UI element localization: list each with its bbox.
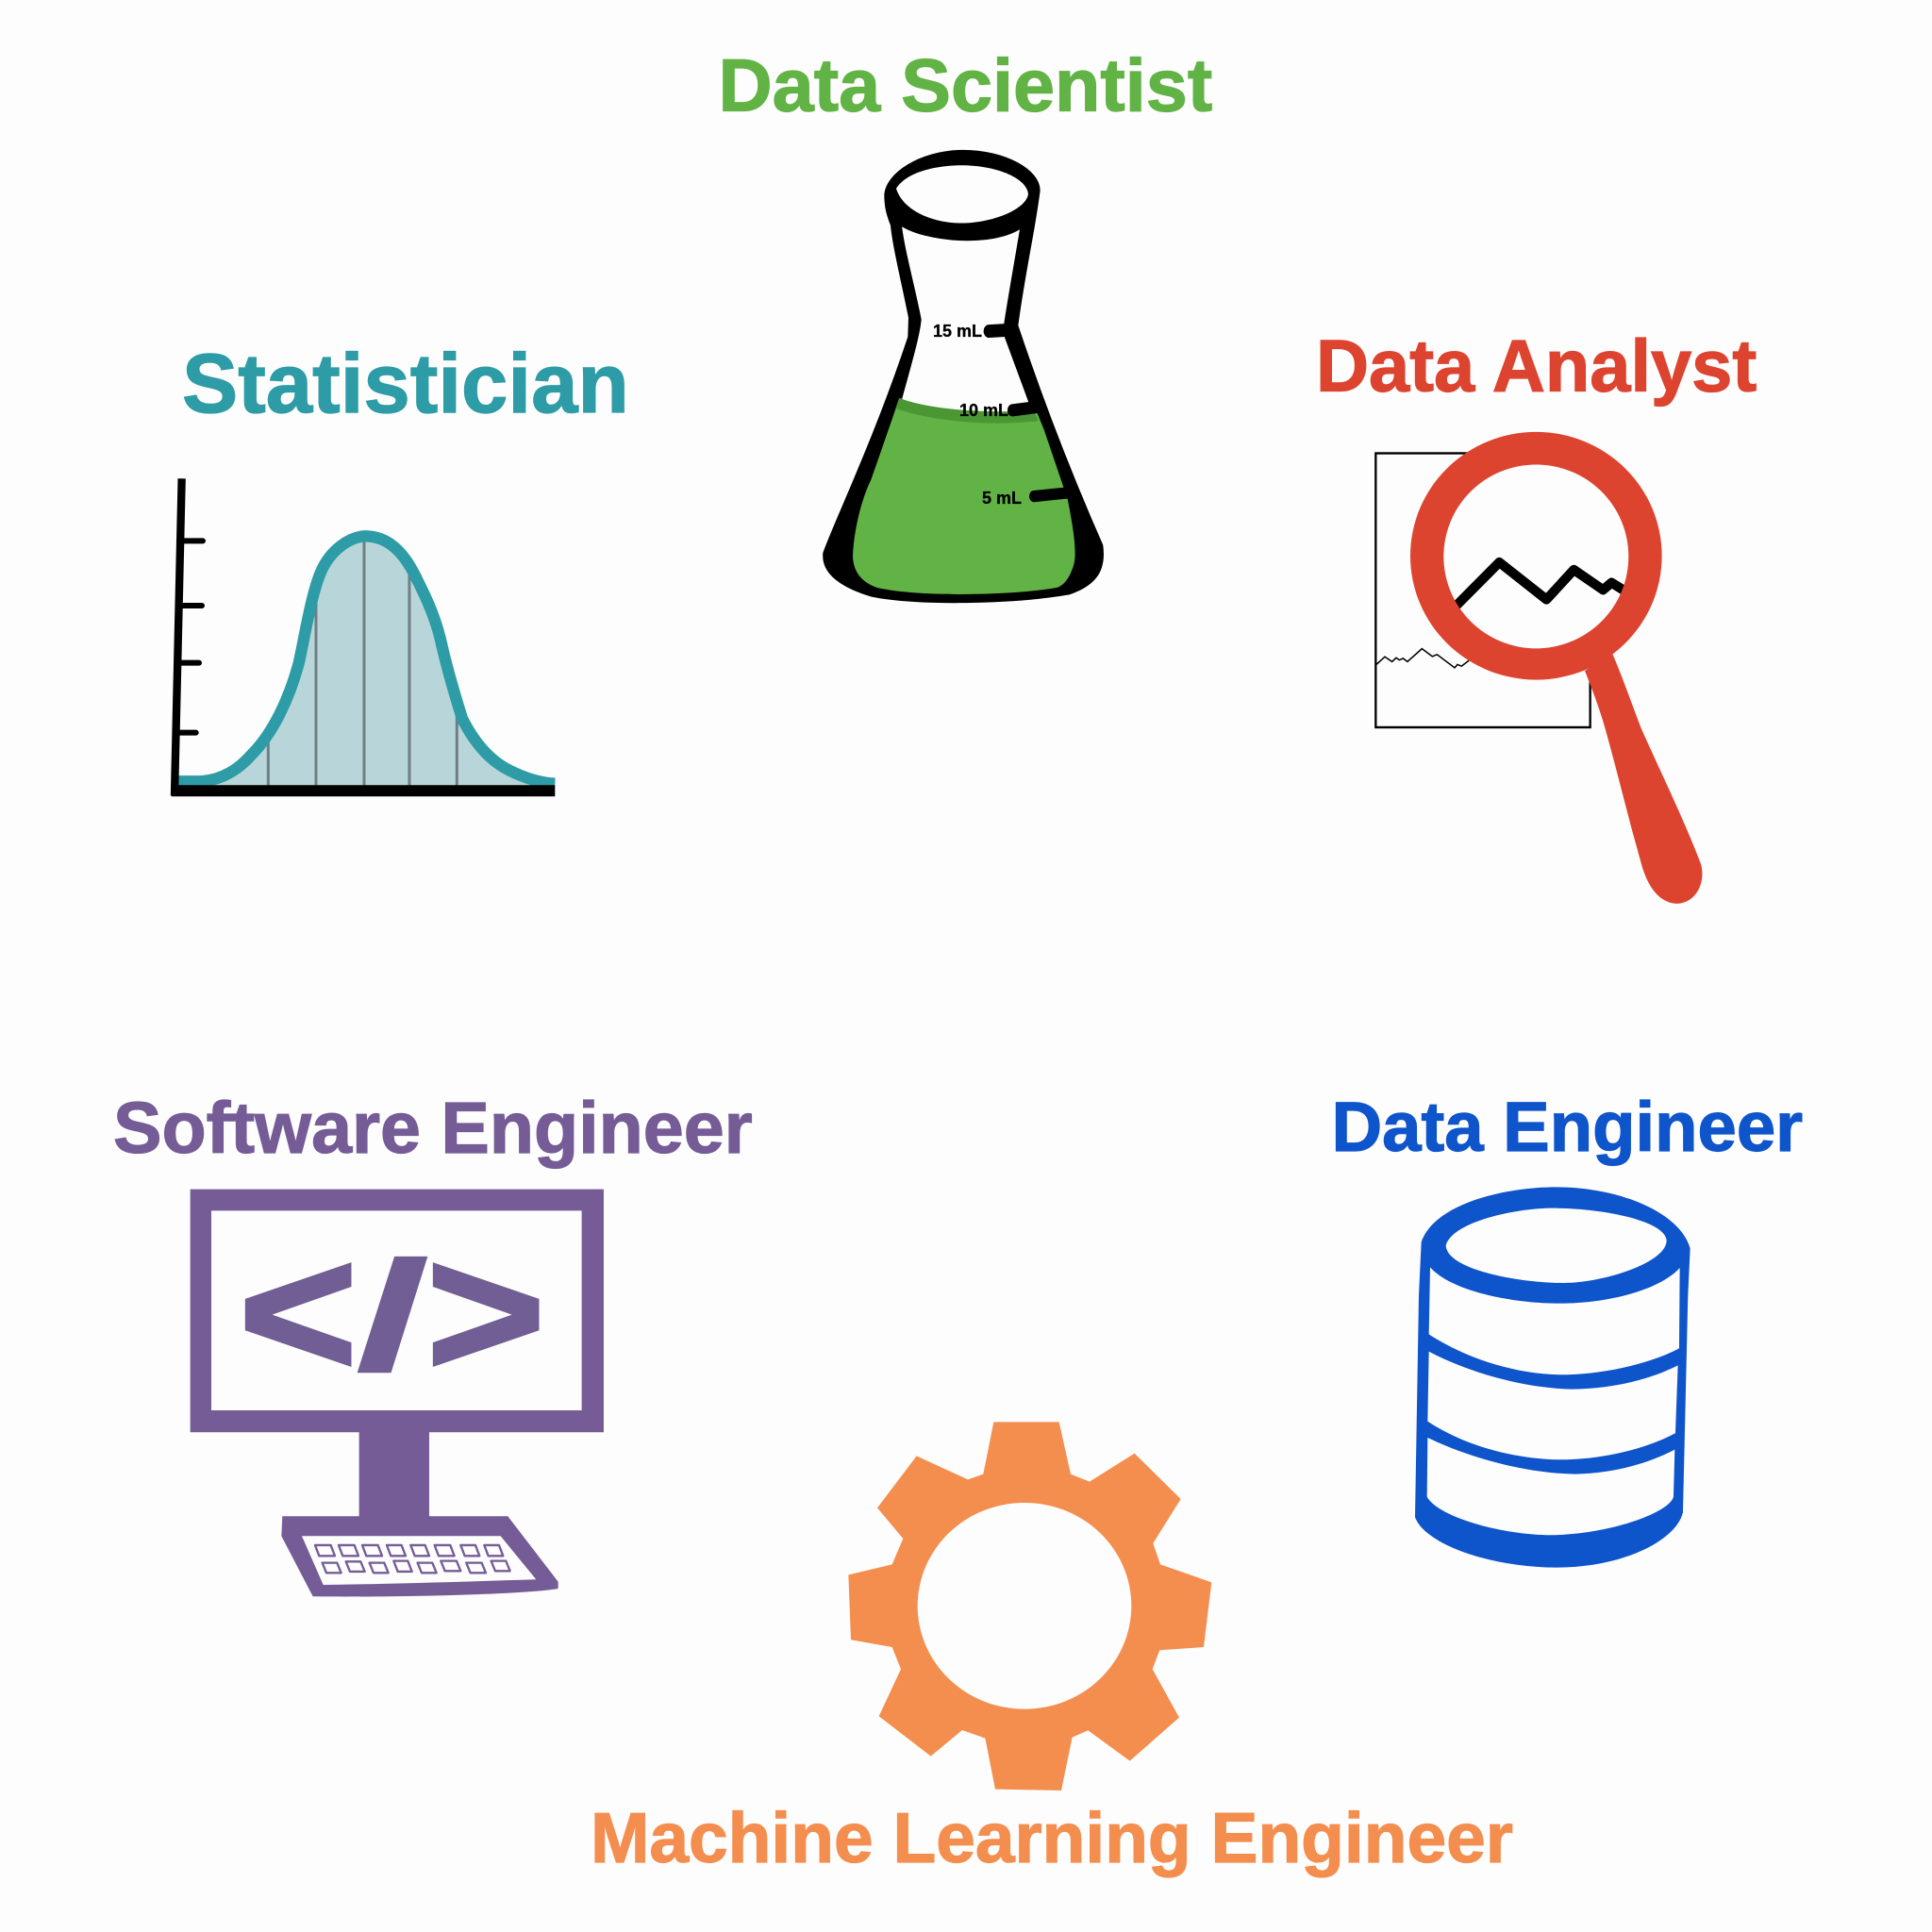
code symbol: greater than: >	[426, 1209, 545, 1415]
icon: computer with code	[191, 1190, 604, 1596]
title: Statistician: Statistician	[182, 337, 629, 430]
label: 10 mL: 10 mL	[959, 401, 1008, 420]
icon: gear	[848, 1422, 1211, 1790]
label: 15 mL: 15 mL	[933, 322, 982, 341]
title: Software Engineer: Software Engineer	[113, 1088, 753, 1169]
icon: database cylinder	[1415, 1187, 1690, 1568]
icon: magnifying glass over chart document	[1375, 432, 1702, 904]
title: Data Engineer: Data Engineer	[1332, 1088, 1803, 1166]
code symbol: less than: <	[239, 1209, 358, 1415]
code symbol: slash: /	[357, 1229, 428, 1402]
chart: bell curve	[172, 478, 555, 795]
icon: flask	[824, 151, 1103, 602]
label: 5 mL: 5 mL	[982, 489, 1022, 508]
title: Data Scientist: Data Scientist	[719, 43, 1212, 126]
title: Machine Learning Engineer: Machine Learning Engineer	[591, 1798, 1513, 1877]
title: Data Analyst: Data Analyst	[1316, 326, 1757, 408]
